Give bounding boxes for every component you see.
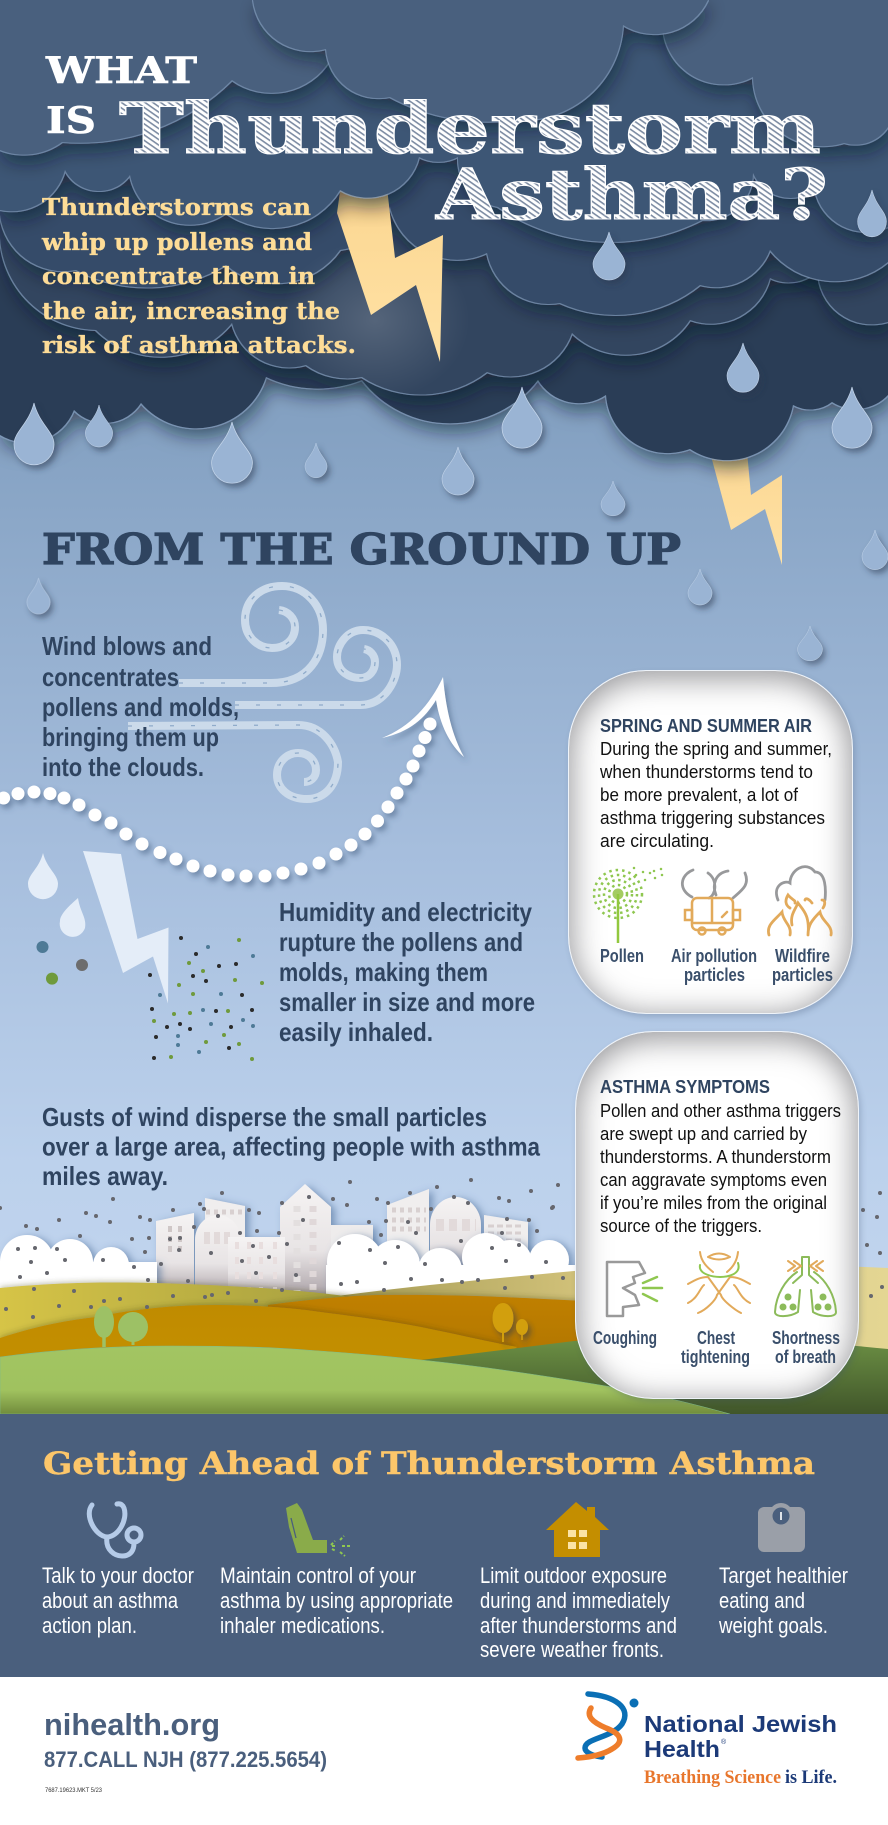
card heading and body: thunderstorms. A thunderstorm: [600, 1146, 830, 1166]
intro text: whip up pollens and: [41, 229, 312, 256]
icon labels: of breath: [774, 1346, 836, 1366]
intro text: the air, increasing the: [42, 298, 340, 325]
icon: stethoscope: [89, 1504, 141, 1556]
contact details: 7687.19623.MKT 5/23: [45, 1787, 102, 1794]
intro text: [41, 194, 356, 359]
contact details: 877.CALL NJH (877.225.5654): [44, 1747, 327, 1772]
icon labels: Chest: [696, 1328, 734, 1348]
card heading and body: Pollen and other asthma triggers: [600, 1100, 840, 1120]
icon: lower lightning bolt: [704, 430, 782, 565]
icon labels: Wildfire: [774, 946, 830, 966]
icon: air pollution bus: [682, 870, 746, 934]
heading: from the ground up: FROM THE GROUND UP: [42, 525, 681, 574]
arrow: dotted path rising to the clouds: [4, 677, 464, 876]
storm clouds: [0, 0, 888, 460]
white clouds behind hills: [0, 1233, 576, 1300]
logo: national jewish health: is Life.: [785, 1767, 837, 1788]
card heading and body: SPRING AND SUMMER AIR: [600, 716, 812, 736]
panel: spring and summer air: [568, 670, 853, 1014]
icon labels: Pollen: [600, 946, 644, 966]
logo: national jewish health: Health: [644, 1736, 720, 1762]
tip: medication: Maintain control of your: [220, 1563, 416, 1588]
icon labels: [592, 1328, 840, 1366]
tip: limit outdoor exposure: Limit outdoor exposure: [480, 1563, 667, 1588]
panel: asthma symptoms: [575, 1031, 859, 1399]
icon labels: Shortness: [772, 1328, 840, 1348]
icon: wind swirls: [128, 586, 397, 799]
icon: coughing: [606, 1262, 662, 1316]
tip: doctor: [42, 1563, 194, 1638]
icon labels: Coughing: [592, 1328, 656, 1348]
tip: doctor: about an asthma: [42, 1588, 179, 1613]
rain drops: [14, 190, 888, 661]
intro text: risk of asthma attacks.: [42, 332, 356, 359]
icon: lungs: [774, 1256, 836, 1316]
intro text: concentrate them in: [42, 263, 315, 290]
heading: getting ahead: Getting Ahead of Thunderstorm Asthma: [43, 1446, 815, 1482]
text: wind blows: Wind blows and: [42, 631, 212, 661]
intro text: Thunderstorms can: [42, 194, 311, 221]
logo: national jewish health: National Jewish: [644, 1711, 837, 1737]
title: what is thunderstorm asthma: Thunderstorm: [119, 87, 821, 170]
contact details: nihealth.org: [44, 1707, 220, 1742]
icon: inhaler: [286, 1503, 351, 1556]
icon: pale lightning and rain: [28, 851, 168, 1004]
icon: wildfire: [768, 866, 831, 934]
icon labels: particles: [772, 964, 832, 984]
rolling hills: [0, 1265, 888, 1420]
text: humidity and electricity: Humidity and electricity: [279, 897, 532, 927]
title: what is thunderstorm asthma: IS: [46, 100, 96, 142]
tip: doctor: action plan.: [42, 1613, 137, 1638]
icon: yellow trees: [492, 1303, 528, 1342]
text: humidity and electricity: easily inhaled.: [279, 1017, 433, 1047]
icon: pollen dandelion: [594, 868, 662, 942]
icon labels: particles: [684, 964, 744, 984]
tip: limit outdoor exposure: [480, 1563, 677, 1662]
tip: healthier eating: Target healthier: [719, 1563, 848, 1588]
card heading and body: [600, 1076, 840, 1236]
text: gusts of wind: over a large area, affecting people with asthma: [42, 1132, 540, 1162]
icon: house: [546, 1502, 609, 1557]
card heading and body: are circulating.: [600, 830, 714, 850]
text: wind blows: [42, 631, 239, 782]
tip: healthier eating: [718, 1563, 848, 1638]
logo: national jewish health: Breathing Science: [644, 1767, 781, 1788]
icon: chest tightening: [688, 1252, 750, 1312]
tip: limit outdoor exposure: after thunderstorms and: [480, 1613, 677, 1638]
text: humidity and electricity: smaller in size and more: [279, 987, 535, 1017]
text: humidity and electricity: rupture the pollens and: [279, 927, 523, 957]
tip: healthier eating: eating and: [719, 1588, 805, 1613]
tip: limit outdoor exposure: during and immediately: [480, 1588, 670, 1613]
title: what is thunderstorm asthma: [45, 50, 828, 236]
tip: healthier eating: weight goals.: [718, 1613, 828, 1638]
text: gusts of wind: Gusts of wind disperse the small particles: [42, 1102, 487, 1132]
text: humidity and electricity: [279, 897, 535, 1047]
card heading and body: asthma triggering substances: [600, 808, 824, 828]
tip: limit outdoor exposure: severe weather fronts.: [480, 1637, 664, 1662]
logo: national jewish health: [578, 1694, 837, 1788]
city skyline: [156, 1184, 528, 1297]
card heading and body: can aggravate symptoms even: [600, 1170, 826, 1190]
card heading and body: if you’re miles from the original: [600, 1192, 826, 1212]
icon labels: [600, 946, 832, 984]
dispersed particles: [0, 1180, 882, 1317]
title: what is thunderstorm asthma: Asthma?: [435, 153, 828, 236]
text: wind blows: into the clouds.: [42, 752, 204, 782]
logo: national jewish health: ®: [721, 1738, 727, 1746]
card heading and body: source of the triggers.: [600, 1216, 762, 1236]
card heading and body: [599, 716, 832, 850]
text: humidity and electricity: molds, making them: [279, 957, 488, 987]
title: what is thunderstorm asthma: WHAT: [45, 50, 197, 92]
tip: medication: asthma by using appropriate: [220, 1588, 453, 1613]
icon labels: tightening: [680, 1346, 750, 1366]
icon labels: Air pollution: [670, 946, 756, 966]
panel: getting ahead band: [0, 1414, 888, 1677]
text: gusts of wind: [42, 1102, 540, 1191]
card heading and body: be more prevalent, a lot of: [600, 784, 798, 804]
tip: medication: [220, 1563, 453, 1638]
card heading and body: During the spring and summer,: [600, 738, 832, 758]
text: wind blows: concentrates: [42, 662, 179, 692]
contact details: [44, 1707, 327, 1794]
sky background: [0, 0, 888, 1420]
text: gusts of wind: miles away.: [42, 1161, 168, 1191]
ruptured pollen particles: [36, 938, 262, 1059]
card heading and body: ASTHMA SYMPTOMS: [600, 1076, 770, 1096]
card heading and body: are swept up and carried by: [600, 1124, 806, 1144]
text: wind blows: bringing them up: [42, 722, 219, 752]
text: wind blows: pollens and molds,: [42, 692, 239, 722]
icon: green trees: [94, 1306, 148, 1347]
card heading and body: when thunderstorms tend to: [599, 762, 812, 782]
icon: main lightning bolt: [337, 170, 443, 362]
icon: weight scale: [758, 1503, 805, 1552]
panel: footer: [0, 1677, 888, 1825]
tip: medication: inhaler medications.: [220, 1613, 385, 1638]
tip: doctor: Talk to your doctor: [42, 1563, 194, 1588]
